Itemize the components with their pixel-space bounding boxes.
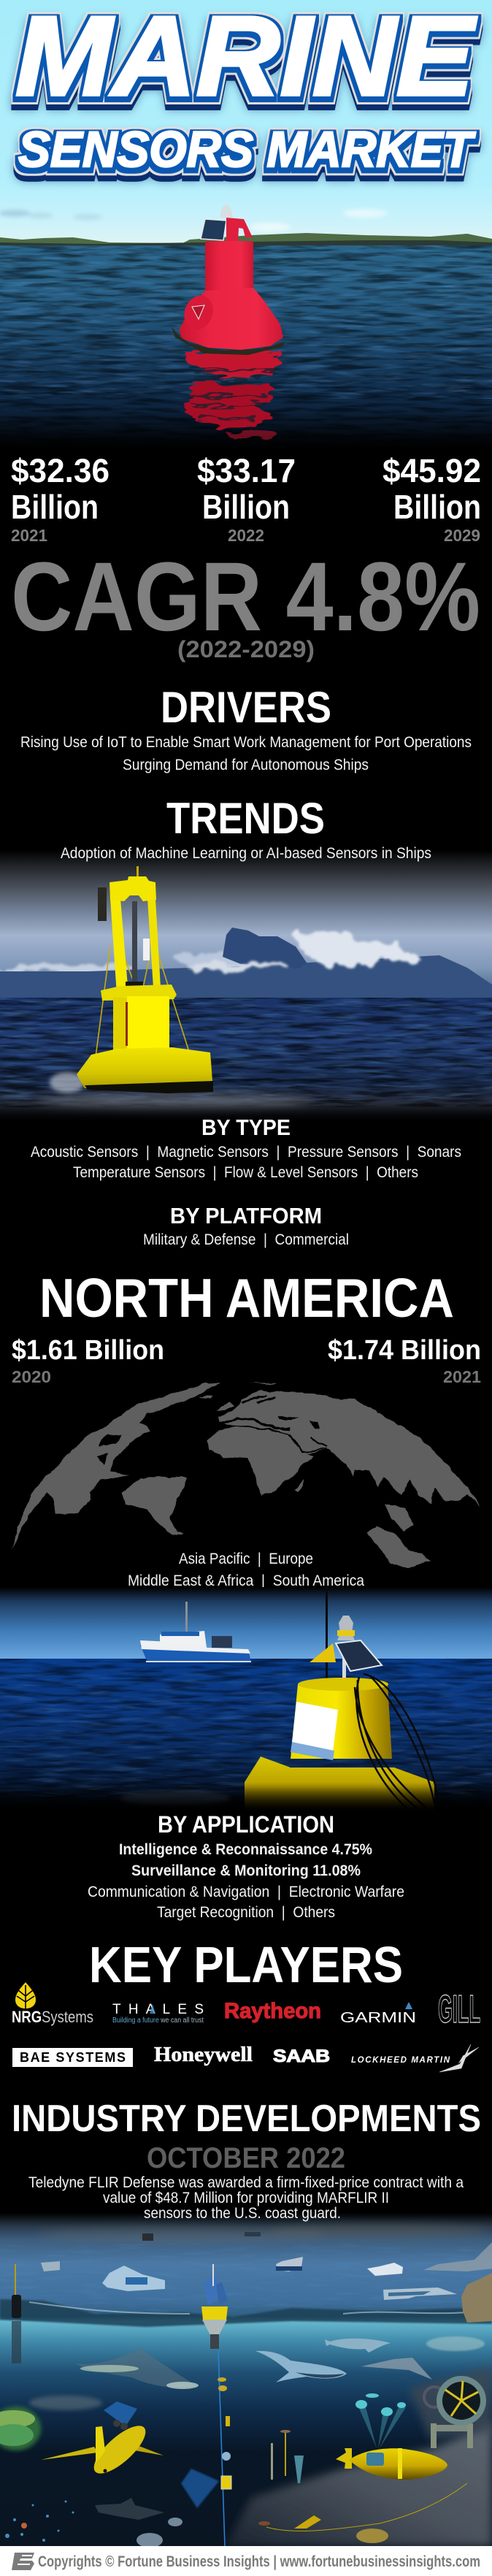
logo: Raytheon: Raytheon <box>224 1999 321 2023</box>
trawl net <box>75 2348 196 2388</box>
sea floor <box>226 2422 492 2546</box>
icon: yellow sensor buoy <box>245 1587 439 1811</box>
by application list: Surveillance & Monitoring 11.08% <box>131 1862 361 1879</box>
by platform list: Military & Defense | Commercial <box>143 1231 349 1248</box>
by type list: Temperature Sensors | Flow & Level Sensors | Others <box>73 1163 418 1181</box>
camera light cone <box>181 2469 219 2508</box>
stat 2029: 2029 <box>444 526 480 545</box>
panel: ocean observing systems illustration <box>0 2213 492 2548</box>
seabed sensors <box>258 2430 467 2531</box>
icon: red buoy <box>172 205 285 355</box>
title: SENSORS MARKET <box>18 121 476 177</box>
north america 2021 value: 2021 <box>443 1367 481 1386</box>
drivers list: Surging Demand for Autonomous Ships <box>123 756 369 773</box>
logo: BAE Systems <box>12 2048 133 2067</box>
industry development text <box>28 2174 464 2222</box>
by application list <box>88 1841 404 1921</box>
stat 2021 <box>11 452 109 545</box>
market size stats <box>11 452 481 545</box>
heading: trends: TRENDS <box>166 794 325 843</box>
heading: by platform: BY PLATFORM <box>170 1203 322 1228</box>
icon: Fortune Business Insights logo <box>12 2553 34 2570</box>
shark <box>95 2498 164 2520</box>
heading: north america: NORTH AMERICA <box>39 1267 454 1329</box>
aquaculture pens <box>383 2288 457 2300</box>
drivers list <box>20 733 472 773</box>
green coral instrument <box>0 2407 41 2450</box>
stat 2021: $32.36 <box>11 452 109 489</box>
cliff and shore <box>461 2273 492 2323</box>
logo: NRG Systems: NRGSystems <box>12 2008 93 2026</box>
by application list: Intelligence & Reconnaissance 4.75% <box>119 1841 372 1858</box>
trends text: Adoption of Machine Learning or AI-based Sensors in Ships <box>61 844 431 862</box>
logo: Lockheed Martin <box>351 2044 479 2072</box>
regions list <box>128 1550 364 1589</box>
stat 2021: 2021 <box>11 526 47 545</box>
panel: hero photo with red buoy <box>0 0 492 457</box>
heading: by type: BY TYPE <box>201 1115 291 1140</box>
logo: Garmin: GARMIN <box>340 2010 416 2026</box>
surface waves <box>0 2299 492 2327</box>
heading: by application: BY APPLICATION <box>158 1811 334 1838</box>
crab and turtle <box>356 2529 388 2543</box>
icon: red buoy reflection <box>181 352 280 440</box>
humpback whale <box>255 2351 347 2382</box>
logo: Garmin <box>340 2002 416 2026</box>
north america 2021 value: $1.74 Billion <box>328 1335 481 1366</box>
jellyfish <box>137 2518 182 2548</box>
yellow glider <box>41 2418 164 2481</box>
glider sonar fan <box>104 2401 137 2426</box>
industry development text: sensors to the U.S. coast guard. <box>144 2204 341 2222</box>
logo: Thales <box>112 2002 204 2025</box>
title <box>15 0 477 177</box>
stat 2029 <box>383 452 481 545</box>
fish school <box>426 2336 485 2351</box>
heading: key players: KEY PLAYERS <box>89 1936 403 1993</box>
logo: Honeywell: Honeywell <box>154 2044 253 2066</box>
regions list: Middle East & Africa | South America <box>128 1572 364 1589</box>
regions list: Asia Pacific | Europe <box>179 1550 313 1567</box>
logo: Thales: THALES <box>112 2002 204 2017</box>
by application list: Communication & Navigation | Electronic Warfare <box>88 1883 404 1900</box>
heading: october 2022: OCTOBER 2022 <box>147 2142 345 2174</box>
heading: drivers: DRIVERS <box>161 683 331 732</box>
logo: BAE Systems: BAE SYSTEMS <box>20 2050 126 2065</box>
north america 2020 value: 2020 <box>12 1367 51 1386</box>
footer <box>0 2546 492 2576</box>
logo: Thales: Building a future we can all trust <box>112 2017 204 2025</box>
plankton dots <box>5 2501 74 2542</box>
tidal turbine <box>424 2376 486 2448</box>
stat 2029: $45.92 <box>383 452 481 489</box>
logo: NRG Systems <box>12 1982 93 2026</box>
logo: Lockheed Martin: LOCKHEED MARTIN <box>351 2056 450 2065</box>
panel: yellow buoy photo <box>0 850 492 1123</box>
surface ships <box>41 2232 403 2291</box>
by application list: Target Recognition | Others <box>157 1903 335 1921</box>
stat 2022 <box>197 452 296 545</box>
industry development text: value of $48.7 Million for providing MARFLIR II <box>103 2189 389 2206</box>
stat 2021: Billion <box>11 488 99 526</box>
stat 2022: $33.17 <box>197 452 296 489</box>
stat 2022: Billion <box>202 488 290 526</box>
left tower buoy <box>12 2264 21 2363</box>
north america 2020 value <box>12 1335 164 1386</box>
by type list <box>31 1143 461 1181</box>
CAGR period: (2022-2029) <box>177 636 315 662</box>
icon: research ship <box>140 1602 251 1662</box>
shoal of krill <box>361 2358 432 2380</box>
logo: Saab: SAAB <box>273 2046 330 2066</box>
plankton cluster <box>29 2396 102 2410</box>
panel: ship and yellow buoy photo <box>0 1587 492 1811</box>
world map globe <box>12 1383 480 1568</box>
sonar beams <box>355 2393 406 2448</box>
yellow AUV <box>336 2448 447 2480</box>
center buoy and mooring line <box>201 2264 231 2546</box>
dolphin <box>325 2339 391 2353</box>
icon: yellow buoy <box>77 866 213 1093</box>
north america 2020 value: $1.61 Billion <box>12 1335 164 1366</box>
stat 2022: 2022 <box>228 526 264 545</box>
north america 2021 value <box>328 1335 481 1386</box>
